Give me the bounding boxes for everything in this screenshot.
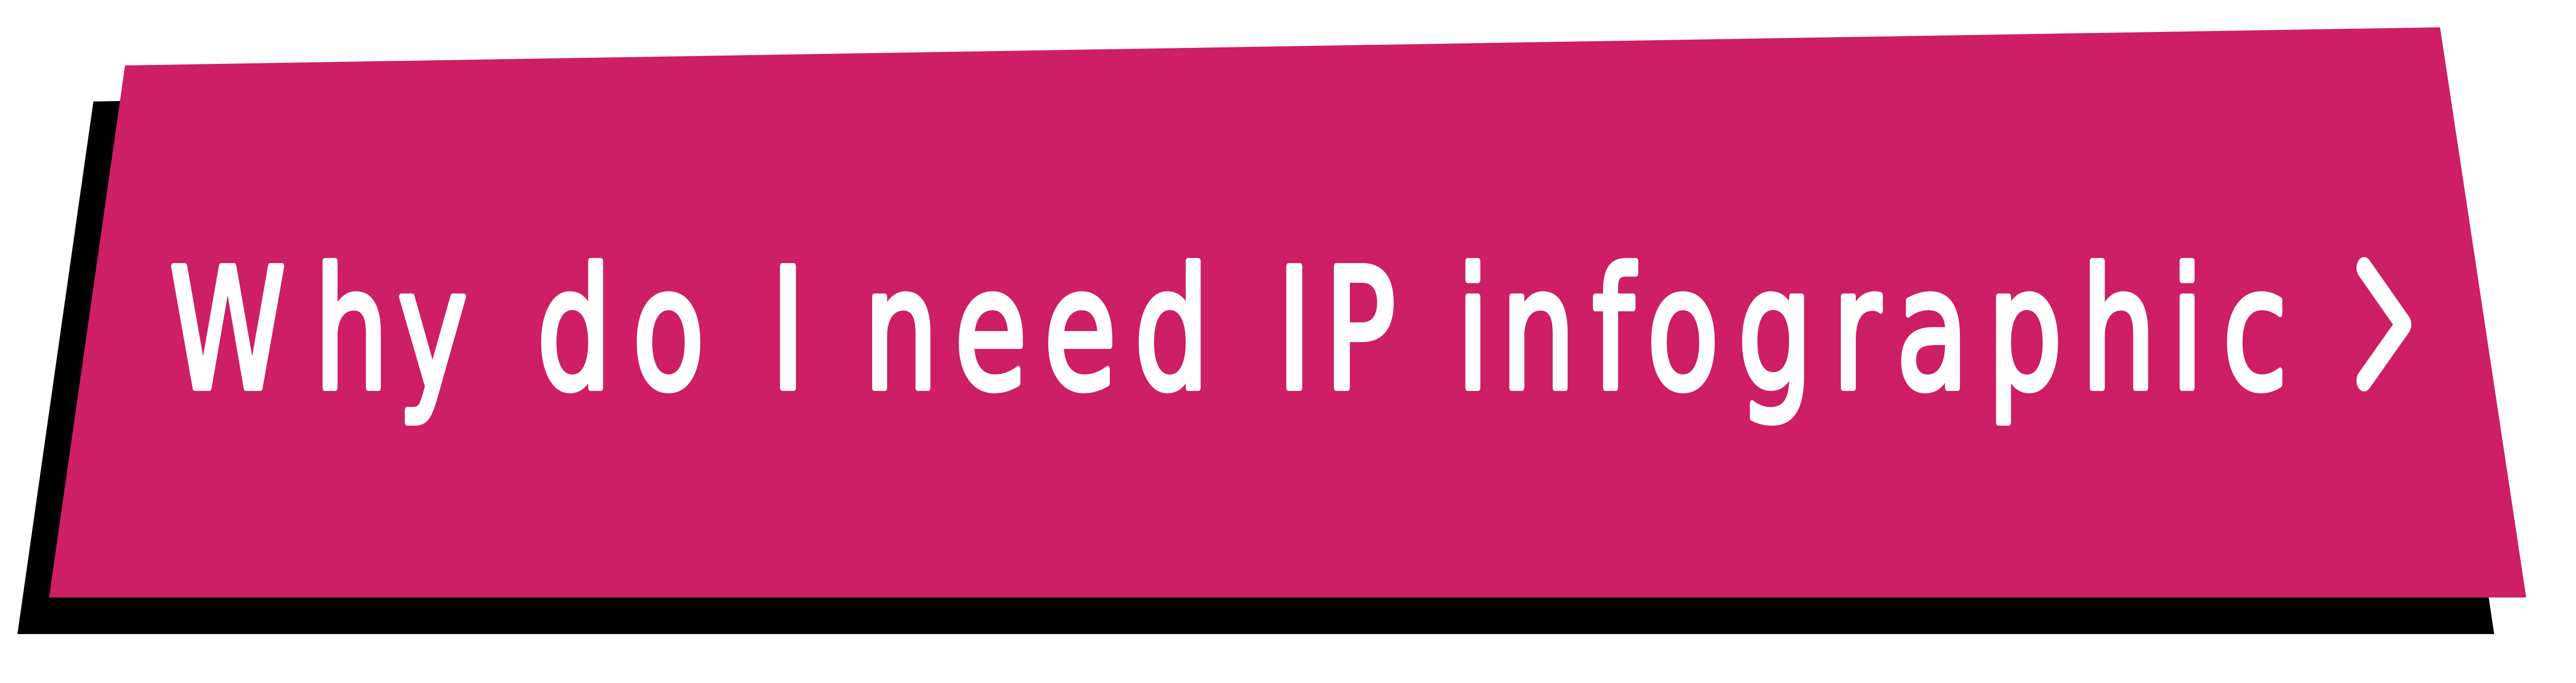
title: Why do I need IP infographic — [170, 234, 2287, 428]
icon: chevron arrow — [2364, 268, 2404, 381]
